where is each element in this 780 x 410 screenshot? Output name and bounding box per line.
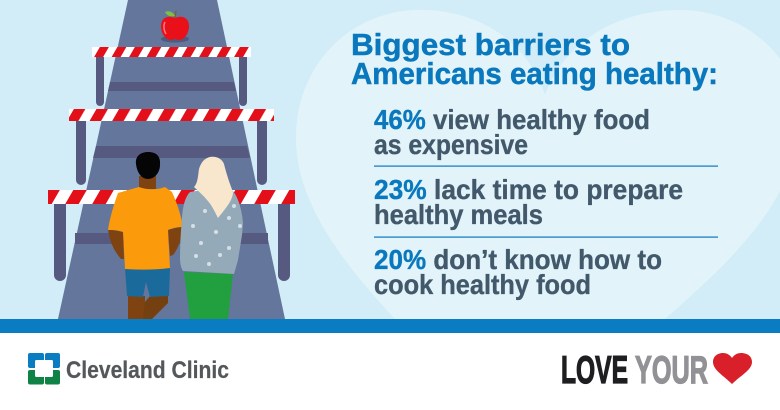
illustration: hurdles and people [48, 0, 295, 319]
logo: Cleveland Clinic [28, 353, 229, 384]
stat: 23%: 23% lack time to prepare [374, 174, 683, 205]
footer panel [0, 333, 780, 410]
background heart [296, 10, 780, 319]
far hurdle [92, 47, 251, 106]
road [58, 0, 285, 319]
icon: apple [161, 11, 189, 42]
stat: 20%: cook healthy food [374, 269, 591, 300]
heading [351, 28, 718, 91]
logo: Love Your Heart: YOUR [635, 349, 708, 392]
person: woman from behind [180, 157, 243, 319]
stat: 23%: healthy meals [374, 199, 543, 230]
logo: Cleveland Clinic: Cleveland Clinic [66, 357, 229, 384]
icon: heart [713, 353, 752, 384]
background [0, 0, 780, 320]
stat: 23% [374, 174, 683, 230]
icon: cross mark [28, 353, 60, 384]
stat: 20%: 20% don’t know how to [374, 244, 662, 275]
middle hurdle [69, 109, 274, 185]
logo: Love Your Heart [561, 349, 752, 392]
logo: Love Your Heart: LOVE [561, 349, 628, 392]
heading: Biggest barriers to [351, 28, 630, 62]
stat: 46%: 46% view healthy food [374, 104, 650, 135]
stat: 46%: as expensive [374, 129, 528, 160]
stat: 46% [374, 104, 650, 160]
person: man from behind [108, 152, 183, 319]
stat: 20% [374, 244, 662, 300]
footer band [0, 319, 780, 333]
road steps [75, 82, 268, 244]
near hurdle [48, 190, 295, 281]
heading: Americans eating healthy: [351, 57, 718, 91]
